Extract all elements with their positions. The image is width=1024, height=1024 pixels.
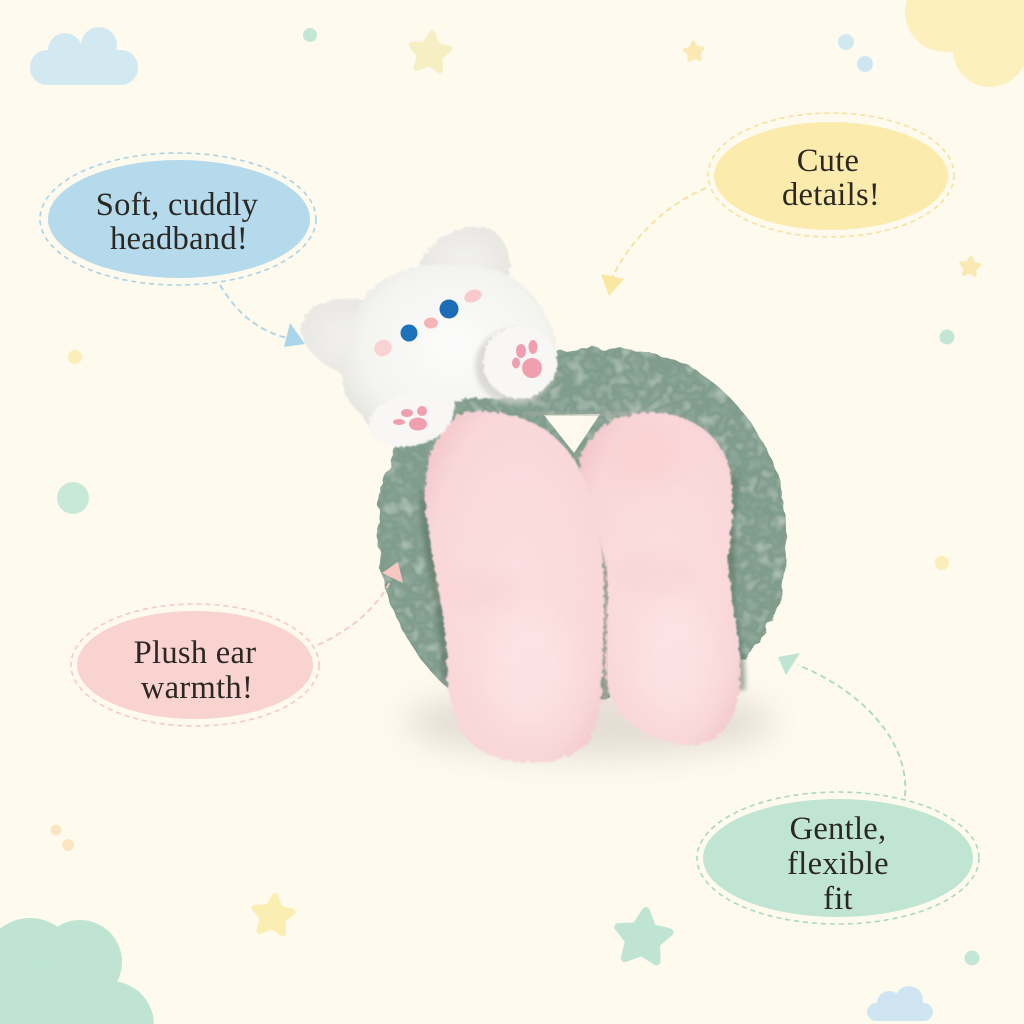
paw pads right xyxy=(512,340,542,378)
cat paw shadows xyxy=(475,328,555,404)
callout: flexible fit xyxy=(697,792,979,924)
callout: flexible fit: flexible xyxy=(787,846,889,882)
decoration: bottom-left green cloud xyxy=(0,918,154,1024)
product: white cat plush xyxy=(302,227,557,454)
cat ears xyxy=(302,227,510,375)
arrow: to ear muff xyxy=(318,562,403,645)
decoration: top-right yellow cloud xyxy=(905,0,1024,87)
decoration: top-left blue cloud xyxy=(30,27,138,85)
cat eyes xyxy=(400,324,418,342)
arrow: to headband xyxy=(220,285,305,347)
arrow: to cat details xyxy=(601,188,706,296)
product shadow xyxy=(405,688,775,756)
cat body xyxy=(342,264,556,446)
callout: plush ear warmth xyxy=(71,604,319,726)
product: pink ear muffs xyxy=(425,412,740,763)
callout: plush ear warmth: Plush ear xyxy=(134,635,256,671)
band shadow beside muffs xyxy=(425,470,740,690)
callout: cute details xyxy=(708,113,954,237)
callout: flexible fit: fit xyxy=(823,881,853,917)
paw pads left xyxy=(393,406,427,430)
right muff xyxy=(580,412,740,745)
callout: soft headband: headband! xyxy=(110,221,248,257)
cat paws xyxy=(483,326,557,398)
callout: flexible fit: Gentle, xyxy=(790,811,886,847)
callout: cute details: details! xyxy=(782,177,880,213)
gap under band xyxy=(544,414,600,453)
decoration: stars xyxy=(252,31,980,962)
callout: soft headband xyxy=(40,153,316,285)
product: green headband xyxy=(378,348,786,700)
cat nose and cheeks xyxy=(424,318,438,328)
left muff xyxy=(425,412,604,763)
callout: plush ear warmth: warmth! xyxy=(141,670,253,706)
callout: cute details: Cute xyxy=(797,143,859,179)
arrow: to headband fit xyxy=(778,653,905,796)
decoration: bottom-right blue cloud xyxy=(867,986,933,1021)
callout: soft headband: Soft, cuddly xyxy=(96,187,259,223)
